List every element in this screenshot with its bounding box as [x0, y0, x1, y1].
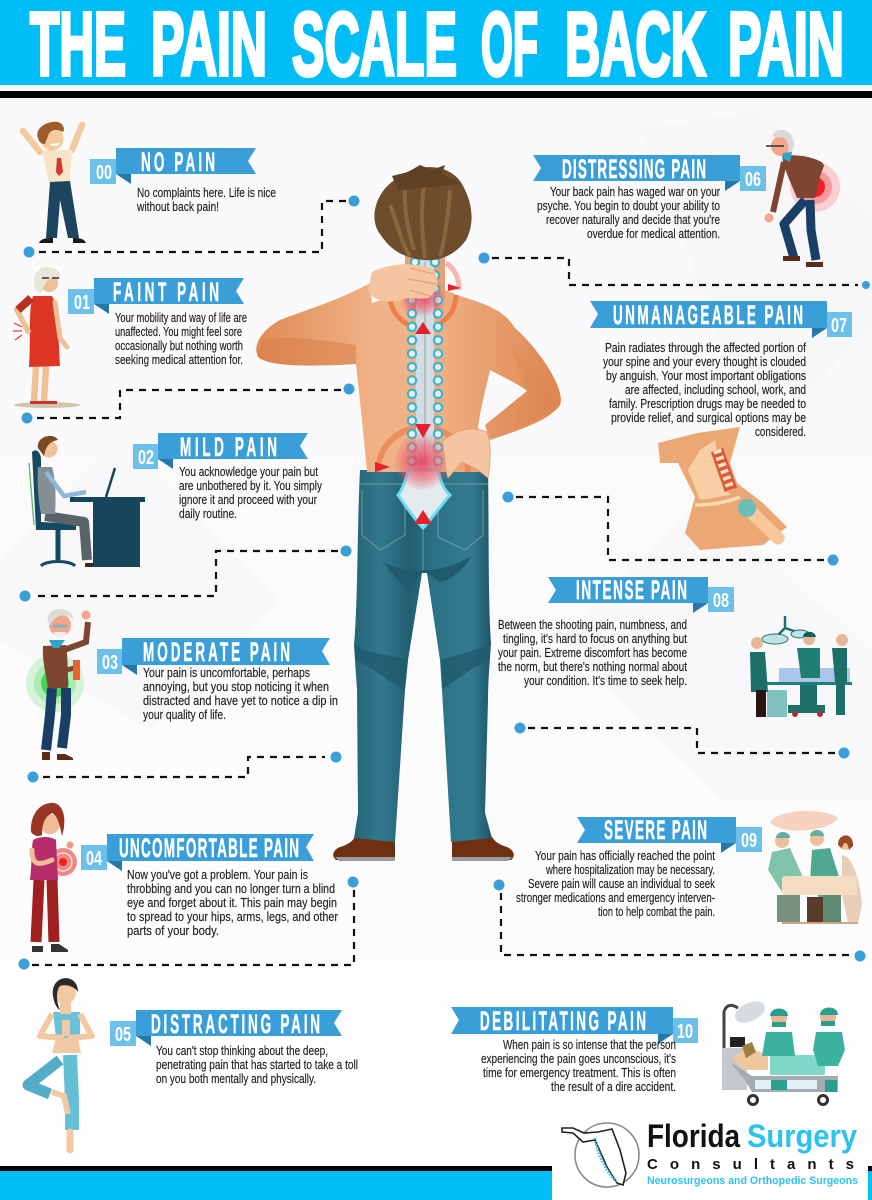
panel: intense pain	[498, 575, 852, 717]
text: debilitating pain: time for emergency treatment. This is often	[483, 1066, 676, 1080]
text: mild pain	[179, 465, 323, 521]
text: faint pain	[115, 311, 247, 367]
ribbon: moderate pain	[97, 637, 330, 675]
ribbon: faint pain: 01	[74, 292, 90, 314]
ribbon: unmanageable pain	[590, 300, 852, 338]
text: no pain	[136, 186, 276, 214]
ribbon: unmanageable pain: UNMANAGEABLE PAIN	[613, 300, 803, 330]
ribbon: distracting pain	[110, 1009, 342, 1046]
shoes	[333, 837, 395, 860]
ribbon: distressing pain: 06	[745, 169, 761, 191]
connector: unmanageable pain	[502, 492, 838, 566]
text: severe pain: where hospitalization may be necessary.	[545, 863, 715, 877]
text: debilitating pain: the result of a dire accident.	[551, 1080, 676, 1094]
text: mild pain: are unbothered by it. You simply	[179, 479, 323, 493]
icon: surgery team	[750, 616, 852, 717]
connector: moderate pain	[28, 752, 342, 782]
text: intense pain: Between the shooting pain, numbness, and	[498, 618, 687, 632]
text: distressing pain: recover naturally and decide that you're	[546, 213, 720, 227]
text: unmanageable pain: Pain radiates through the affected portion of	[605, 341, 806, 355]
ribbon: distressing pain: DISTRESSING PAIN	[562, 154, 706, 184]
text: intense pain: the norm, but there's nothing normal about	[498, 660, 687, 674]
text: intense pain: tingling, it's hard to focus on anything but	[503, 632, 687, 646]
connector: distressing pain	[478, 252, 870, 289]
text: uncomfortable pain	[127, 868, 338, 938]
ribbon: faint pain: FAINT PAIN	[113, 277, 219, 307]
connector: uncomfortable pain	[18, 876, 358, 970]
text: distressing pain: Your back pain has waged war on your	[550, 185, 720, 199]
connector: mild pain	[20, 546, 352, 602]
text: faint pain: Your mobility and way of life are	[115, 311, 247, 325]
panel: faint pain	[13, 267, 247, 408]
ribbon: mild pain: 02	[138, 447, 154, 469]
icon: office worker at desk	[29, 436, 145, 567]
text: unmanageable pain: family. Prescription drugs may be needed to	[609, 397, 806, 411]
panel: moderate pain	[26, 609, 338, 760]
text: distracting pain: penetrating pain that has started to take a toll	[156, 1058, 358, 1072]
icon: woman holding back	[13, 267, 80, 408]
logo text: Florida	[647, 1118, 740, 1154]
ribbon: distracting pain: DISTRACTING PAIN	[151, 1009, 320, 1039]
footer bars	[0, 1166, 872, 1200]
torso and arms	[256, 283, 561, 472]
ribbon: severe pain	[577, 815, 762, 853]
ribbon: unmanageable pain: 07	[831, 315, 847, 337]
text: unmanageable pain	[603, 341, 806, 439]
icon: emergency surgery	[722, 997, 845, 1104]
text: severe pain: stronger medications and emergency interven-	[516, 891, 715, 905]
ribbon: debilitating pain	[451, 1006, 698, 1044]
ribbon: no pain	[90, 147, 256, 184]
text: distressing pain	[537, 185, 720, 241]
text: severe pain: tion to help combat the pain.	[598, 905, 715, 919]
text: faint pain: seeking medical attention for.	[115, 353, 243, 367]
ribbon: intense pain: 08	[713, 590, 729, 612]
text: unmanageable pain: your spine and your every thought is clouded	[603, 355, 806, 369]
panel: no pain	[23, 122, 276, 243]
text: distressing pain: overdue for medical attention.	[587, 227, 720, 241]
connector: intense pain	[514, 722, 850, 758]
text: uncomfortable pain: eye and forget about it. This pain may begin	[127, 896, 337, 910]
hair	[374, 167, 472, 260]
ribbon: no pain: NO PAIN	[141, 147, 215, 177]
ribbon: debilitating pain: DEBILITATING PAIN	[480, 1006, 646, 1036]
text: severe pain	[516, 849, 716, 919]
text: mild pain: daily routine.	[179, 507, 237, 521]
panel: unmanageable pain	[590, 300, 852, 550]
ribbon: faint pain	[68, 277, 244, 314]
icon: woman with red target	[30, 803, 77, 952]
text: severe pain: Severe pain will cause an individual to seek	[528, 877, 716, 891]
logo: Florida Surgery Consultants: Surgery	[747, 1118, 857, 1154]
ribbon: uncomfortable pain	[81, 833, 314, 871]
panel: distracting pain	[28, 978, 358, 1150]
text: debilitating pain	[481, 1038, 676, 1094]
arcs	[390, 295, 456, 328]
text: debilitating pain: experiencing the pain goes unconscious, it's	[481, 1052, 676, 1066]
logo: Florida Surgery Consultants: Consultants	[647, 1156, 854, 1173]
ribbon: distressing pain	[533, 154, 766, 191]
panel: severe pain	[516, 811, 862, 924]
text: uncomfortable pain: throbbing and you can no longer turn a blind	[127, 882, 335, 896]
text: unmanageable pain: considered.	[755, 425, 806, 439]
ribbon: uncomfortable pain: UNCOMFORTABLE PAIN	[119, 833, 299, 863]
text: distracting pain: You can't stop thinking about the deep,	[156, 1044, 328, 1058]
text: severe pain: Your pain has officially reached the point	[535, 849, 715, 863]
ribbon: moderate pain: 03	[102, 652, 118, 674]
connector: severe pain	[494, 880, 866, 962]
text: moderate pain: Your pain is uncomfortable, perhaps	[143, 666, 310, 680]
text: unmanageable pain: are affected, including school, work, and	[625, 383, 806, 397]
icon: elderly man with green glow	[26, 609, 90, 760]
header banner	[0, 0, 872, 98]
text: debilitating pain: When pain is so intense that the person	[503, 1038, 676, 1052]
text: moderate pain: your quality of life.	[143, 708, 226, 722]
ribbon: mild pain	[133, 432, 308, 469]
panel: debilitating pain	[451, 997, 845, 1104]
right hand	[442, 429, 490, 478]
icon: Florida map in circle	[562, 1123, 639, 1187]
ribbon: severe pain: 09	[741, 830, 757, 852]
text: distracting pain: on you both mentally and physically.	[156, 1072, 316, 1086]
panel: distressing pain	[533, 130, 840, 267]
text: distressing pain: psyche. You begin to doubt your ability to	[537, 199, 720, 213]
ribbon: intense pain	[548, 575, 734, 613]
red arrows	[375, 249, 461, 524]
illustration: neck and cervical spine	[658, 427, 787, 550]
icon: yoga woman	[28, 978, 92, 1150]
ribbon: distracting pain: 05	[115, 1024, 131, 1046]
ribbon: severe pain: SEVERE PAIN	[604, 815, 707, 845]
connector: no pain	[24, 196, 360, 258]
icon: operating room team	[768, 811, 862, 924]
text: no pain: without back pain!	[136, 200, 219, 214]
ribbon: moderate pain: MODERATE PAIN	[143, 637, 290, 667]
text: moderate pain: distracted and have yet to notice a dip in	[143, 694, 338, 708]
text: intense pain: your condition. It's time to seek help.	[524, 674, 687, 688]
text: uncomfortable pain: parts of your body.	[127, 924, 219, 938]
panel: mild pain	[29, 432, 323, 567]
ribbon: intense pain: INTENSE PAIN	[576, 575, 687, 605]
icon: elderly man bending	[764, 130, 840, 267]
text: moderate pain: annoying, but you stop noticing it when	[143, 680, 329, 694]
text: faint pain: unaffected. You might feel sore	[115, 325, 242, 339]
ribbon: debilitating pain: 10	[677, 1021, 693, 1043]
panel: uncomfortable pain	[30, 803, 338, 952]
text: intense pain	[498, 618, 687, 688]
central figure: man with spine	[256, 165, 561, 861]
connector: faint pain	[22, 384, 354, 424]
logo: Florida Surgery Consultants: Neurosurgeons and Orthopedic Surgeons	[647, 1175, 858, 1187]
title	[30, 0, 844, 95]
text: mild pain: You acknowledge your pain but	[179, 465, 318, 479]
text: no pain: No complaints here. Life is nice	[137, 186, 276, 200]
logo: Florida Surgery Consultants	[562, 1118, 858, 1187]
icon: happy man	[23, 122, 86, 243]
left hand	[368, 264, 437, 302]
text: distracting pain	[156, 1044, 358, 1086]
text: unmanageable pain: provide relief, and surgical options may be	[611, 411, 806, 425]
ribbon: no pain: 00	[96, 162, 112, 184]
text: uncomfortable pain: to spread to your hips, arms, legs, and other	[127, 910, 338, 924]
ribbon: uncomfortable pain: 04	[86, 848, 103, 870]
text: faint pain: occasionally but nothing worth	[115, 339, 243, 353]
text: unmanageable pain: by anguish. Your most important obligations	[606, 369, 806, 383]
text: intense pain: your pain. Extreme discomfort has become	[498, 646, 687, 660]
ribbon: mild pain: MILD PAIN	[180, 432, 277, 462]
pelvis	[398, 470, 450, 528]
text: mild pain: ignore it and proceed with your	[179, 493, 317, 507]
text: moderate pain	[143, 666, 338, 722]
text: uncomfortable pain: Now you've got a problem. Your pain is	[127, 868, 308, 882]
jeans	[354, 470, 492, 842]
spine	[403, 258, 443, 473]
